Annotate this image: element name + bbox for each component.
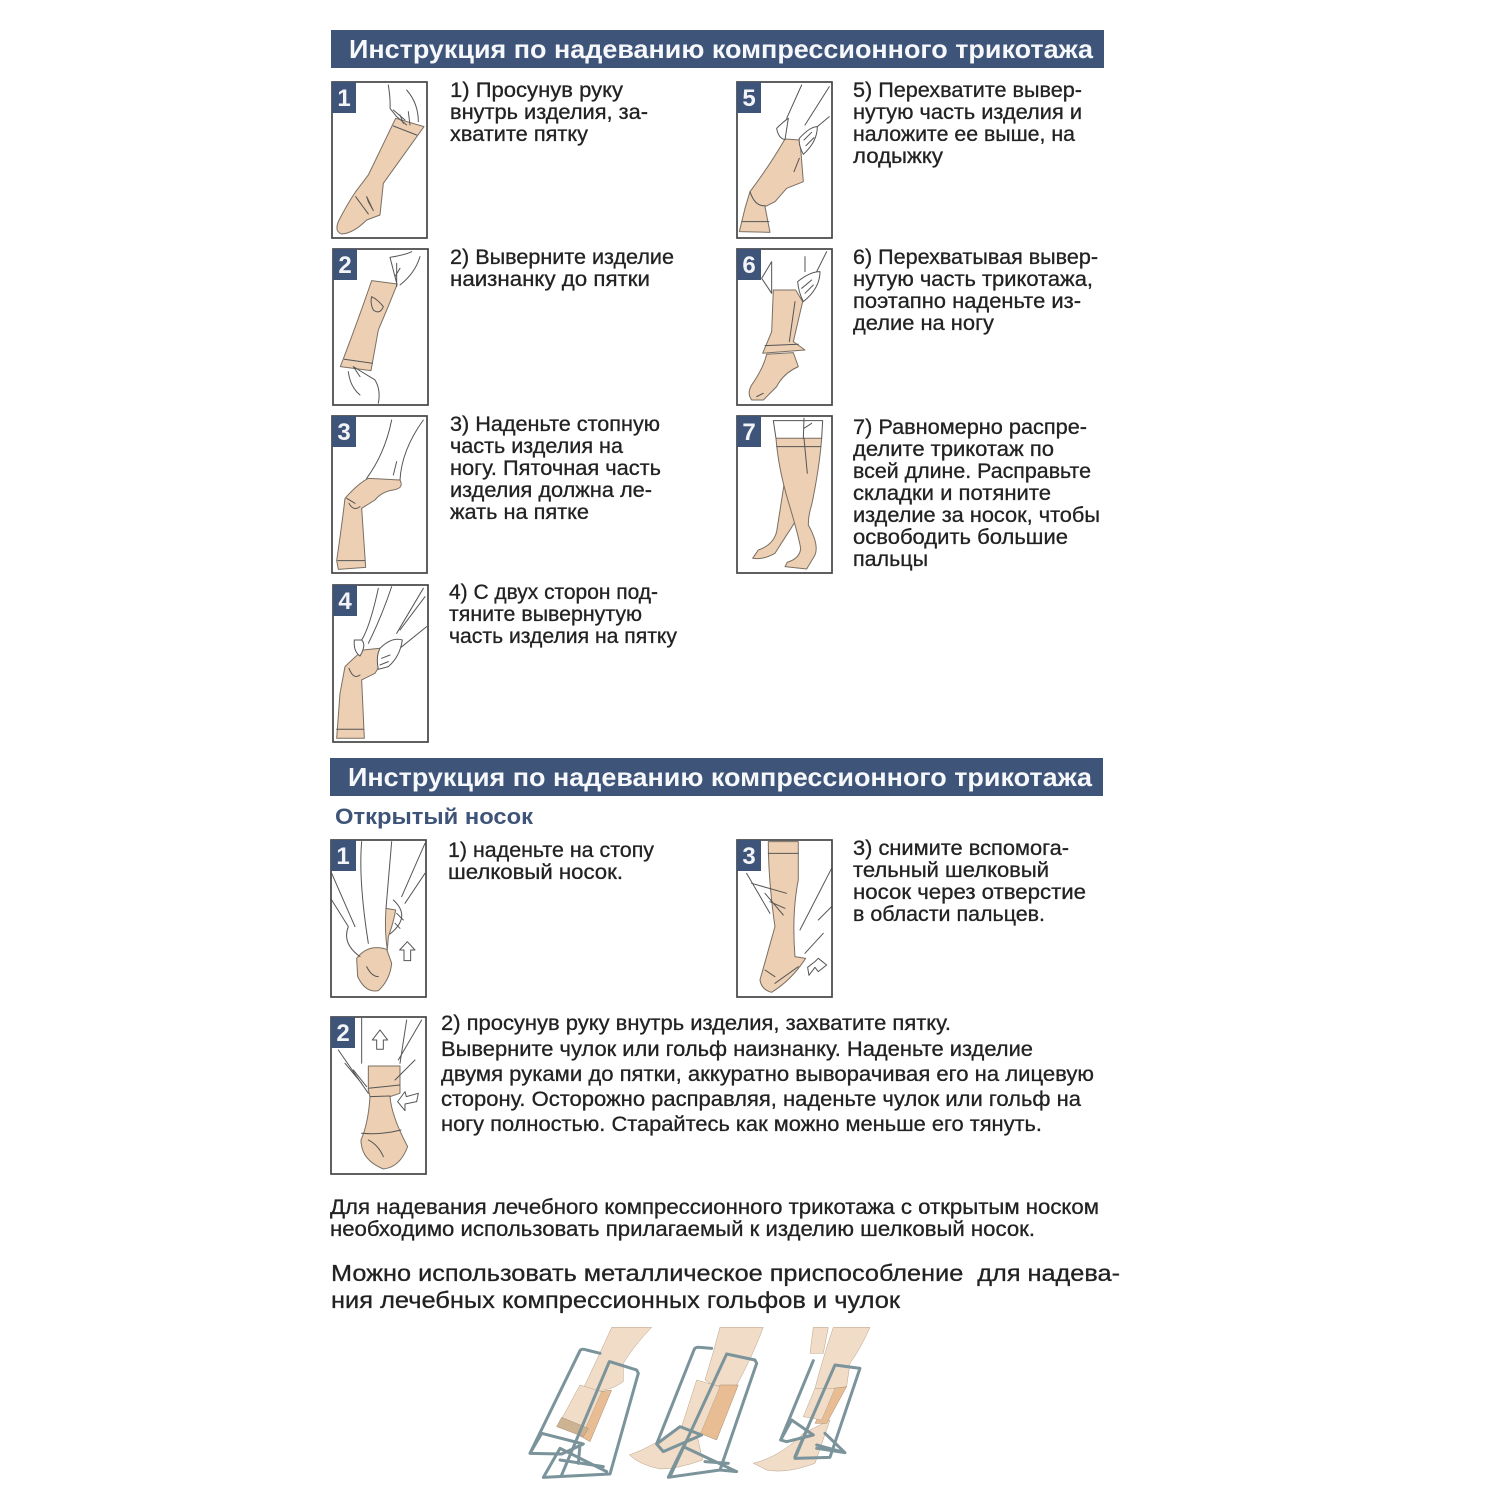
text: step 7	[853, 416, 1100, 571]
panel: step 4 illustration: 4	[338, 588, 352, 615]
panel: step 5 illustration	[737, 82, 832, 238]
text: step 6: нутую часть трикотажа,	[853, 268, 1093, 291]
text: metal device note	[331, 1260, 1120, 1313]
panel: step 2 illustration	[333, 249, 428, 405]
text: step 6	[853, 246, 1098, 335]
text: step 5: 5) Перехватите вывер-	[853, 79, 1082, 102]
text: open toe step 1	[448, 839, 655, 884]
device figure 2	[629, 1327, 763, 1477]
text: step 3: жать на пятке	[450, 501, 589, 524]
text: open toe step 2	[441, 1012, 1094, 1136]
panel: step 1 illustration	[332, 82, 427, 238]
panel: open toe step 1 illustration: 1	[336, 843, 350, 870]
panel: open toe step 3 illustration	[737, 840, 832, 997]
text: open toe step 1: шелковый носок.	[448, 861, 623, 884]
text: step 5: наложите ее выше, на	[853, 123, 1075, 146]
panel: step 7 illustration: 7	[742, 419, 756, 446]
text: step 3: 3) Наденьте стопную	[450, 413, 660, 436]
subheading: open toe: Открытый носок	[335, 804, 534, 829]
panel: step 3 illustration: 3	[337, 419, 351, 446]
device figure 1	[530, 1327, 652, 1477]
text: step 1: хватите пятку	[450, 123, 589, 146]
panel: open toe step 2 illustration	[331, 1017, 426, 1174]
text: metal device note: ния лечебных компрессионных гольфов и чулок	[331, 1287, 901, 1313]
panel: step 7 illustration	[737, 416, 832, 573]
panel: step 2 illustration: 2	[338, 252, 352, 279]
text: step 7: 7) Равномерно распре-	[853, 416, 1087, 439]
text: step 1	[450, 79, 648, 146]
text: step 7: освободить большие	[853, 526, 1068, 549]
text: step 7: складки и потяните	[853, 482, 1051, 505]
text: silk sock note: Для надевания лечебного компрессионного трикотажа с открытым носком	[330, 1196, 1099, 1219]
text: open toe step 2: двумя руками до пятки, аккуратно выворачивая его на лицевую	[441, 1063, 1094, 1086]
text: step 5	[853, 79, 1082, 168]
text: step 7: делите трикотаж по	[853, 438, 1054, 461]
text: step 7: изделие за носок, чтобы	[853, 504, 1100, 527]
text: step 2	[450, 246, 674, 291]
text: step 6: 6) Перехватывая вывер-	[853, 246, 1098, 269]
text: step 5: нутую часть изделия и	[853, 101, 1082, 124]
device figure 3	[753, 1327, 870, 1471]
text: step 7: всей длине. Расправьте	[853, 460, 1091, 483]
panel: step 4 illustration	[333, 585, 428, 742]
text: open toe step 3: 3) снимите вспомога-	[853, 837, 1069, 860]
text: step 3: ногу. Пяточная часть	[450, 457, 661, 480]
panel: step 5 illustration: 5	[742, 85, 756, 112]
text: step 3: часть изделия на	[450, 435, 623, 458]
heading: second instruction banner: Инструкция по надеванию компрессионного трикотажа	[348, 762, 1093, 792]
text: step 5: лодыжку	[853, 145, 944, 168]
panel: open toe step 3 illustration: 3	[742, 843, 756, 870]
text: step 4	[449, 581, 678, 648]
text: step 1: 1) Просунув руку	[450, 79, 624, 102]
text: step 2: наизнанку до пятки	[450, 268, 650, 291]
text: open toe step 3: носок через отверстие	[853, 881, 1086, 904]
text: step 6: поэтапно наденьте из-	[853, 290, 1081, 313]
text: silk sock note	[330, 1196, 1099, 1241]
text: step 3	[450, 413, 661, 524]
panel: step 6 illustration: 6	[742, 252, 756, 279]
text: open toe step 1: 1) наденьте на стопу	[448, 839, 655, 862]
text: open toe step 3: в области пальцев.	[853, 903, 1045, 926]
text: step 4: часть изделия на пятку	[449, 625, 678, 648]
text: open toe step 2: ногу полностью. Старайтесь как можно меньше его тянуть.	[441, 1113, 1042, 1136]
text: open toe step 2: 2) просунув руку внутрь изделия, захватите пятку.	[441, 1012, 951, 1035]
text: open toe step 3	[853, 837, 1086, 926]
text: metal device note: Можно использовать металлическое приспособление для надева-	[331, 1260, 1120, 1286]
panel: step 6 illustration	[737, 249, 832, 405]
panel: open toe step 1 illustration	[331, 840, 426, 997]
text: step 7: пальцы	[853, 548, 928, 571]
text: step 2: 2) Выверните изделие	[450, 246, 674, 269]
text: open toe step 2: сторону. Осторожно расправляя, наденьте чулок или гольф на	[441, 1088, 1081, 1111]
text: step 4: тяните вывернутую	[449, 603, 642, 626]
illustration: metal stocking aids	[530, 1327, 870, 1477]
text: open toe step 3: тельный шелковый	[853, 859, 1049, 882]
panel: step 1 illustration: 1	[337, 85, 351, 112]
text: open toe step 2: Выверните чулок или гольф наизнанку. Наденьте изделие	[441, 1038, 1033, 1061]
text: silk sock note: необходимо использовать прилагаемый к изделию шелковый носок.	[330, 1218, 1035, 1241]
heading: first instruction banner: Инструкция по надеванию компрессионного трикотажа	[349, 34, 1094, 64]
text: step 3: изделия должна ле-	[450, 479, 652, 502]
text: step 6: делие на ногу	[853, 312, 995, 335]
text: step 1: внутрь изделия, за-	[450, 101, 648, 124]
panel: open toe step 2 illustration: 2	[336, 1020, 350, 1047]
text: step 4: 4) С двух сторон под-	[449, 581, 658, 604]
panel: step 3 illustration	[332, 416, 427, 573]
